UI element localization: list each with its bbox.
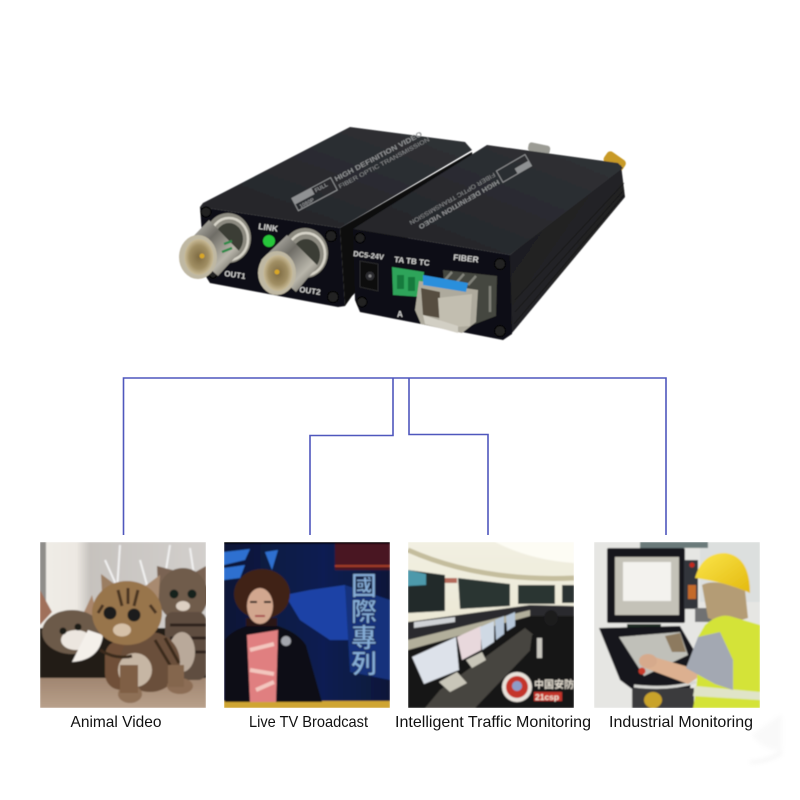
on-screen title: 國 <box>351 571 377 601</box>
screws <box>201 207 338 302</box>
photo: traffic control room <box>408 542 574 708</box>
caption: Live TV Broadcast: Live TV Broadcast <box>249 714 369 731</box>
label: LINK: LINK <box>258 221 280 234</box>
decorative corner smudge <box>750 714 782 762</box>
label: OUT2: OUT2 <box>299 285 322 297</box>
on-screen title: 專 <box>351 623 377 653</box>
label: DC5-24V: DC5-24V <box>353 249 384 262</box>
photo: industrial worker at control panel <box>594 542 760 708</box>
watermark logo <box>502 672 574 702</box>
device markings: model print upside down <box>408 153 532 233</box>
device: receiver with BNC outputs <box>179 127 474 307</box>
line to Industrial Monitoring <box>393 378 666 535</box>
worker <box>639 553 760 708</box>
on-screen title: 際 <box>351 597 377 627</box>
caption: Industrial Monitoring: Industrial Monitoring <box>609 714 753 731</box>
SFP module <box>415 275 478 333</box>
device markings: model print <box>292 128 431 212</box>
connector: BNC OUT2 <box>258 228 328 295</box>
on-screen title <box>351 571 377 679</box>
photo: news anchor <box>224 542 390 708</box>
kitten: centre <box>92 574 193 703</box>
power jack <box>360 261 378 291</box>
line to Animal Video <box>124 378 393 535</box>
watermark logo: 中国安防 <box>534 678 574 691</box>
product photo: two fiber optic transceivers <box>179 127 627 340</box>
device markings: model print: FULL <box>314 182 330 194</box>
caption: Intelligent Traffic Monitoring: Intelligent Traffic Monitoring <box>395 714 591 731</box>
desk <box>425 628 540 708</box>
photo: kittens <box>40 542 208 708</box>
device markings: model print upside down: HIGH DEFINITION VIDEO <box>417 178 500 230</box>
rear BNC connectors <box>527 142 627 173</box>
screws <box>355 233 506 336</box>
wall screens <box>408 570 574 613</box>
terminal block: green <box>392 267 424 297</box>
dark overhead monitor band <box>408 605 574 642</box>
kitten: left <box>40 590 103 662</box>
console with keyboard <box>599 626 696 708</box>
staff <box>530 610 557 660</box>
line to Intelligent Traffic Monitoring <box>409 378 488 535</box>
label: FIBER: FIBER <box>453 252 479 265</box>
device markings: model print upside down: FIBER OPTIC TRANSMISSION <box>408 171 496 225</box>
device markings: model print: 1080P <box>299 197 316 210</box>
label: A: A <box>397 310 403 319</box>
on-screen title: 列 <box>351 649 377 679</box>
connector: BNC OUT1 <box>179 213 251 279</box>
watermark logo: 21csp <box>535 692 559 702</box>
label: TA TB TC: TA TB TC <box>394 255 430 268</box>
anchor <box>225 569 322 702</box>
device markings: model print: HIGH DEFINITION VIDEO <box>334 131 424 183</box>
control panel and screen <box>607 548 713 636</box>
device markings: model print: FIBER OPTIC TRANSMISSION <box>338 137 431 190</box>
device: transmitter with fiber port <box>353 142 627 340</box>
indicator: green LED <box>263 235 275 247</box>
monitors <box>408 612 574 708</box>
connector lines <box>124 378 666 535</box>
caption: Animal Video: Animal Video <box>70 714 162 731</box>
line to Live TV Broadcast <box>310 378 393 535</box>
fiber cage <box>443 270 497 326</box>
kitten: right <box>157 566 208 680</box>
label: OUT1: OUT1 <box>224 269 247 281</box>
